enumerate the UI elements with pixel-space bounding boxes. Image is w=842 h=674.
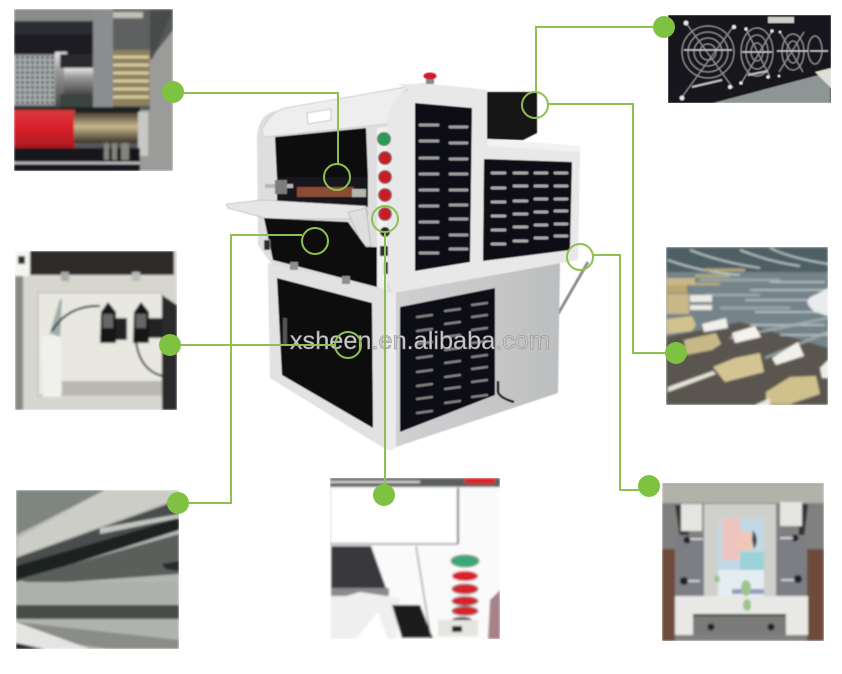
emergency stop button	[424, 72, 436, 84]
upper side vent panel	[415, 103, 472, 271]
callout: UV lamps	[548, 104, 687, 364]
callout: cooling fans	[522, 16, 675, 118]
lower side vent panel	[400, 288, 495, 432]
handle strut	[558, 262, 588, 314]
power cable	[498, 381, 514, 402]
photo: pumps and bottle in cabinet	[15, 251, 177, 410]
control strip	[377, 127, 387, 290]
central machine	[226, 72, 588, 450]
buttons	[378, 132, 392, 274]
callout: control panel	[372, 206, 398, 506]
upper cabinet body	[257, 83, 580, 293]
photo: coating tray with sample picture	[662, 483, 824, 641]
callout: guide rails	[167, 228, 328, 514]
watermark: xsheen.en.alibaba.com	[290, 327, 550, 355]
feed tray	[226, 200, 368, 219]
photo: UV lamp tubes	[666, 247, 828, 405]
photo: rollers and gears	[14, 9, 173, 171]
photo: guide rails	[16, 490, 179, 649]
right vent panel	[483, 159, 572, 261]
lower cabinet body	[268, 263, 560, 450]
upper lower black panel	[264, 218, 377, 287]
roller	[265, 180, 366, 197]
lower door	[277, 278, 373, 428]
tray bracket	[348, 208, 371, 247]
black fan housing	[485, 92, 537, 140]
callout: coating tray	[567, 244, 660, 497]
hinges	[290, 262, 350, 284]
top handle	[307, 109, 331, 124]
callout: rollers	[162, 81, 350, 190]
side face	[387, 84, 580, 293]
callout: pumps	[159, 332, 361, 358]
roof panel	[262, 85, 418, 137]
photo: control panel close-up	[330, 478, 500, 640]
upper front opening	[275, 128, 368, 178]
photo: cooling fans	[668, 15, 831, 103]
